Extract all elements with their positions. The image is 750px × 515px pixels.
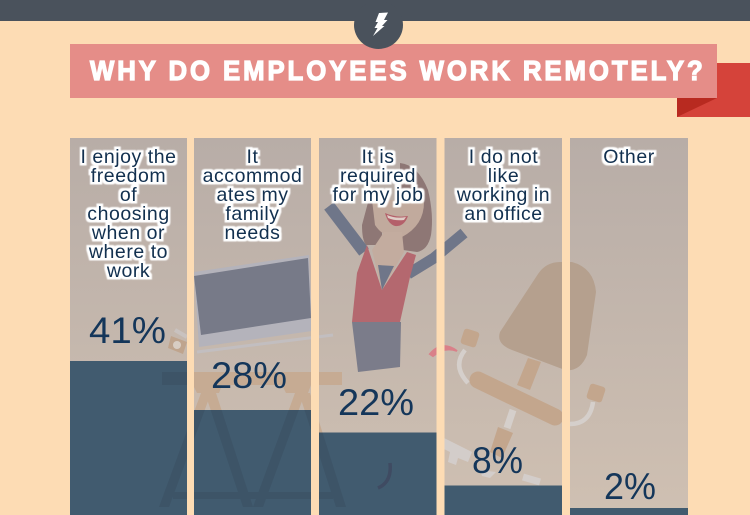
title banner: WHY DO EMPLOYEES WORK REMOTELY? — [90, 55, 703, 86]
illustration: office scene seen through the columns — [159, 163, 606, 507]
header bar — [0, 0, 750, 21]
column 1 label: when or — [91, 222, 165, 244]
icon: office chair — [444, 262, 606, 482]
column 2 label: ates my — [216, 184, 289, 206]
value: 2%: 2% — [604, 466, 656, 507]
title banner — [70, 44, 717, 98]
value: 28%: 28% — [211, 355, 287, 396]
column 1 label: freedom — [91, 165, 166, 187]
value: 41%: 41% — [89, 310, 166, 351]
column 3 label: It is — [361, 146, 395, 168]
column 2 label: family — [225, 203, 280, 225]
icon: desk — [194, 372, 342, 432]
value: 8%: 8% — [472, 440, 523, 481]
column 1 label: work — [106, 260, 150, 282]
column 2 label: needs — [225, 222, 280, 244]
column 5 label: Other — [603, 146, 655, 168]
ribbon tail — [677, 63, 750, 117]
icon: computer monitor — [194, 255, 333, 352]
column 4 label — [456, 146, 550, 225]
column 3 label: for my job — [332, 184, 424, 206]
bars: percentage fills — [70, 361, 688, 515]
column 1 label: where to — [88, 241, 168, 263]
column 4 label: I do not — [469, 146, 538, 168]
column 4 label: like — [488, 165, 519, 187]
illustration shadows seen through the bars — [160, 410, 392, 506]
panels: column backgrounds — [70, 138, 688, 515]
icon: lightning badge — [354, 1, 403, 49]
value: 22%: 22% — [338, 382, 414, 423]
column 3 label — [332, 146, 424, 206]
column 2 label: accommod — [203, 165, 302, 187]
column 1 label: of — [120, 184, 137, 206]
column 3 label: required — [340, 165, 416, 187]
column 2 label — [203, 146, 302, 244]
column 1 label — [80, 146, 177, 282]
icon: woman — [329, 163, 464, 372]
column 4 label: an office — [464, 203, 543, 225]
column 2 label: It — [247, 146, 258, 168]
icon: desk camera — [168, 330, 187, 354]
column 1 label: choosing — [87, 203, 170, 225]
column 1 label: I enjoy the — [80, 146, 177, 168]
column 4 label: working in — [456, 184, 550, 206]
